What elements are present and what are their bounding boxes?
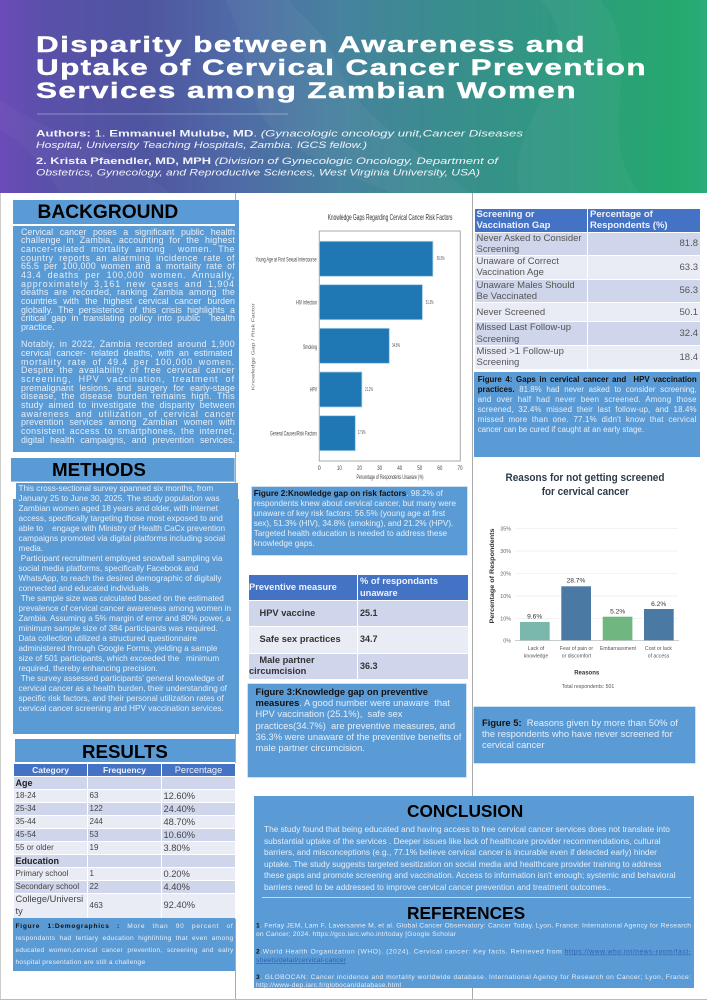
table: demographics: 45-54	[16, 830, 36, 839]
text: methods: connected and educated individuals.	[18, 584, 151, 593]
y axis ticks	[500, 526, 511, 644]
heading: references: REFERENCES	[407, 903, 525, 923]
text: methods: media.	[18, 544, 43, 553]
category labels: General Causes/Risk Factors	[270, 430, 317, 438]
category labels: Smoking	[303, 344, 317, 351]
caption: figure 5: the respondents who have never screened for	[482, 728, 673, 739]
caption: figure 4: missed more than one. 77.1% didn't know that cervical	[478, 415, 697, 424]
title: Uptake of Cervical Cancer Prevention	[36, 55, 647, 80]
table: demographics: 19	[90, 843, 98, 852]
heading: results	[15, 739, 235, 762]
bars	[319, 241, 433, 451]
bar value labels: 5.2%	[610, 608, 625, 616]
text: conclusion: barriers need to be addressed to improve cervical cancer prevention and treatment outcomes..	[264, 882, 611, 892]
y axis ticks: 10%	[500, 617, 511, 623]
text: conclusion: these gaps and promote screening and vaccination. Access to information isn't enough; systemic and behavioral	[264, 870, 676, 880]
text: methods: size of 501 participants, which exceeded the minimum	[18, 654, 219, 663]
table: demographics: 1	[90, 869, 94, 878]
text: methods: prevalence of cervical cancer awareness among women in	[18, 604, 231, 613]
y axis title: Percentage of Respondents	[489, 528, 496, 624]
category labels: of access	[648, 654, 670, 660]
table: screening and vaccination gaps: 56.3	[680, 285, 698, 296]
chart: knowledge gaps on risk factors	[250, 212, 463, 481]
text: background: screening, HPV vaccination, treatment of	[21, 374, 235, 384]
header banner	[0, 0, 707, 193]
table: screening and vaccination gaps: Be Vaccinated	[476, 291, 537, 302]
caption: figure 3: practices(34.7%) are preventive measures, and	[256, 720, 455, 731]
caption: figure 2: Targeted health education is needed to address these	[254, 529, 447, 538]
table: demographics: Primary school	[16, 869, 68, 878]
text: background: awareness and utilization of cervical cancer	[21, 409, 235, 419]
text: background: 65.5 per 100,000 women and a mortality rate of	[21, 261, 235, 271]
y axis ticks: 20%	[500, 571, 511, 577]
table: demographics: 4.40%	[164, 882, 190, 892]
authors	[36, 128, 523, 178]
table: preventive measures: 34.7	[360, 634, 378, 644]
table: demographics: 24.40%	[164, 804, 195, 814]
table: demographics: Frequency	[103, 765, 146, 775]
text: background: Despite the availability of free cervical cancer	[21, 365, 235, 375]
table: demographics: 22	[90, 882, 98, 891]
caption: figure 4: cancer can be cured if caught at an early stage.	[478, 425, 644, 434]
text: conclusion: uptake. The study suggests targeted sesitization on social media and healthcare provider training to address	[264, 859, 661, 869]
table: demographics: 35-44	[16, 817, 36, 826]
text: conclusion: The study found that being educated and having access to free cervical cancer services does not translate into	[264, 824, 670, 834]
category labels: knowledge	[524, 654, 548, 660]
table: preventive measures	[249, 575, 468, 679]
text: references: on Cancer; 2024. https://gco.iarc.who.int/today [Google Scholar	[256, 931, 457, 938]
caption: figure 1	[13, 918, 235, 971]
table: screening and vaccination gaps: Unaware Males Should	[476, 280, 575, 291]
authors: 2. Krista Pfaendler, MD, MPH (Division of Gynecologic Oncology, Department of	[36, 156, 500, 167]
table: demographics: Education	[16, 856, 59, 866]
total respondents note: Total respondents: 501	[562, 684, 614, 690]
text: references	[256, 922, 691, 988]
text: methods: campaigns promoted via digital platforms including social	[18, 534, 225, 543]
caption: figure 5: Figure 5: Reasons given by more than 50% of	[482, 716, 678, 728]
text: background: digital health campaigns, and prevention services.	[21, 435, 235, 445]
y axis ticks: 35%	[500, 526, 511, 532]
table: preventive measures: % of respondants	[360, 576, 438, 586]
caption: figure 5	[474, 707, 695, 763]
text: background: critical gap in translating policy into public health	[21, 313, 235, 323]
authors: Hospital, University Teaching Hospitals, Zambia. IGCS fellow.)	[36, 140, 367, 151]
caption: figure 1: respondants had tertiary education highlihting that even among	[16, 935, 234, 942]
panel: methods: METHODS	[52, 459, 146, 480]
text: methods: The survey assessed participants' general knowledge of	[21, 674, 224, 683]
table: demographics	[14, 763, 236, 919]
text: background: study aimed to investigate the disparity between	[21, 400, 235, 410]
x axis: 70	[458, 465, 463, 472]
table: preventive measures: Male partner	[259, 655, 315, 665]
caption: figure 4	[474, 372, 700, 457]
heading: conclusion: CONCLUSION	[407, 801, 523, 821]
x axis	[318, 465, 463, 481]
table: preventive measures: 25.1	[360, 608, 378, 618]
text: background: consistent access to smartphones, the internet,	[21, 426, 235, 436]
table: demographics: 0.20%	[164, 869, 190, 879]
caption: figure 3: male partner circumcision.	[256, 742, 365, 753]
text: methods: Zambian women aged 18 years and older, with internet	[18, 504, 218, 513]
text: background: country reports an alarming incidence rate of	[21, 253, 235, 263]
table: screening and vaccination gaps: 81.8	[680, 238, 698, 249]
y axis title: Knowledge Gap / Risk Factor	[250, 303, 256, 390]
table: screening and vaccination gaps: Percentage of	[590, 209, 653, 220]
table: preventive measures: unaware	[360, 588, 398, 598]
axis title: Reasons	[574, 670, 600, 676]
caption: figure 4: Figure 4: Gaps in cervical cancer and HPV vaccination	[478, 375, 697, 384]
text: methods: able to engage with Ministry of Health CaCx prevention	[18, 524, 225, 533]
table: demographics: 48.70%	[164, 817, 195, 827]
bar value labels: 6.2%	[651, 601, 666, 608]
text: conclusion: substantial uptake of the services . Deeper issues like lack of healthcare provider recommendations, cultural	[264, 836, 661, 846]
text: background: cancer-related mortality among women. The	[21, 244, 235, 254]
text: methods: This cross-sectional survey spanned six months, from	[18, 484, 213, 493]
table: screening and vaccination gaps: 50.1	[680, 307, 698, 318]
table: demographics: 92.40%	[164, 900, 195, 910]
text: background	[21, 227, 235, 445]
panel: methods	[11, 458, 239, 734]
caption: figure 3: HPV vaccination (25.1%), safe sex	[256, 708, 402, 719]
table: demographics: College/University	[16, 894, 83, 916]
value labels: 51.3%	[426, 300, 434, 306]
text: methods: January 25 to June 30, 2025. The study population was	[18, 494, 220, 503]
table: screening and vaccination gaps	[475, 209, 700, 369]
text: methods: Zambia. Assuming a 5% margin of error and 80% power, a	[18, 614, 231, 623]
table: preventive measures: circumcision	[249, 666, 306, 676]
text: methods: Participant recruitment employed snowball sampling via	[21, 554, 222, 563]
text: background: cervical cancer- related deaths, with an estimated	[21, 348, 233, 358]
caption: figure 1: hospital presentation are still a challenge	[16, 959, 145, 966]
text: references: sheets/detail/cervical-cancer	[256, 957, 347, 964]
panel: conclusion and references	[254, 796, 694, 988]
x axis: 40	[397, 465, 402, 472]
authors: Obstetrics, Gynecology, and Reproductive Sciences, West Virginia University, USA)	[36, 168, 480, 178]
category labels: Cost or lack	[645, 646, 672, 652]
text: background: Cervical cancer poses a significant public health	[21, 227, 235, 237]
text: methods: specific risk factors, and their personal utilization rates of	[18, 694, 224, 703]
heading: background	[13, 200, 235, 226]
text: background: deaths are recorded, ranking Zambia among the	[21, 287, 235, 297]
text: methods: social media platforms, specifically Facebook and	[18, 564, 198, 573]
text: methods: access, specifically targeting those most exposed to and	[18, 514, 223, 523]
text: background: countries with the highest cervical cancer burden	[21, 296, 235, 306]
category labels: Embarrassment	[600, 646, 637, 652]
text: methods: Data collection utilized a structured questionnaire	[18, 634, 197, 643]
table: demographics: 63	[90, 791, 98, 800]
caption: figure 2: unaware of key risk factors: 56.5% (young age at first	[254, 509, 445, 518]
category labels: or discomfort	[562, 654, 592, 660]
text: conclusion	[264, 824, 676, 892]
caption: figure 2: Figure 2:Knowledge gap on risk factors. 98.2% of	[254, 489, 443, 498]
chart title: Reasons for not getting screened	[506, 472, 664, 484]
table: preventive measures: Preventive measure	[249, 582, 337, 592]
table: screening and vaccination gaps: Missed >1 Follow-up	[476, 346, 564, 357]
table: screening and vaccination gaps: Respondents (%)	[590, 220, 668, 231]
x axis: 0	[318, 465, 321, 472]
table: preventive measures: HPV vaccine	[260, 608, 315, 618]
value labels: 17.9%	[358, 430, 366, 436]
x axis: 60	[437, 465, 443, 472]
panel: background	[13, 200, 239, 452]
caption: figure 3	[248, 684, 466, 777]
category labels: HPV	[310, 386, 317, 394]
table: demographics: Age	[16, 778, 33, 788]
table: demographics: 122	[90, 804, 103, 813]
chart title: for cervical cancer	[542, 486, 630, 498]
category labels: Fear of pain or	[560, 646, 593, 652]
table: demographics: 3.80%	[164, 843, 190, 853]
table: demographics: 25-34	[16, 804, 36, 813]
value labels: 34.8%	[392, 343, 400, 349]
text: background: challenge in Zambia, accounting for the highest	[21, 235, 235, 245]
bar value labels: 28.7%	[567, 578, 585, 584]
text: methods	[18, 484, 231, 713]
caption: figure 2: knowledge gaps.	[254, 539, 315, 548]
table: demographics: 18-24	[16, 791, 36, 800]
x axis: 10	[337, 465, 342, 472]
caption: figure 3: Figure 3:Knowledge gap on preventive	[256, 686, 428, 696]
caption: figure 2: sex), 51.3% (HIV), 34.8% (smoking), and 21.2% (HPV).	[254, 519, 453, 528]
x axis: 30	[377, 465, 382, 472]
category labels: Young Age at First Sexual Intercourse	[256, 256, 317, 264]
caption: figure 4: practices. 81.8% had never asked to consider screening,	[478, 385, 697, 394]
table: demographics: 53	[90, 830, 98, 839]
text: references: 2.World Health Organization (WHO). (2024). Cervical cancer: Key facts. Retrieved from https://www.who.int/news-room/fact-	[256, 948, 691, 956]
text: background: disease, the disease burden remains high. This	[21, 391, 235, 401]
value labels: 56.5%	[437, 256, 445, 262]
panel: results	[13, 739, 236, 971]
chart: reasons for not getting screened	[489, 472, 679, 690]
table: screening and vaccination gaps: Unaware of Correct	[476, 256, 559, 267]
table: screening and vaccination gaps: Screening	[476, 357, 519, 368]
text: background: premalignant lesions, and surgery for early-stage	[21, 383, 235, 393]
caption: figure 4: screened, 32.4% missed their last follow-up, and 18.4%	[478, 405, 697, 414]
y axis ticks: 0%	[503, 638, 511, 644]
caption: figure 5: cervical cancer	[482, 739, 545, 750]
table: screening and vaccination gaps: Screening	[476, 244, 519, 255]
text: background: Notably, in 2022, Zambia recorded around 1,900	[21, 339, 235, 349]
category labels	[524, 646, 672, 660]
text: background: globally. The persistence of this crisis highlights a	[21, 305, 235, 315]
value labels	[358, 256, 445, 436]
text: methods: minimum sample size of 384 participants was required.	[18, 624, 218, 633]
text: background: mortality rate of 49.4 per 100,000 women.	[21, 357, 235, 367]
text: background: 43.4 deaths per 100,000 women. Annually,	[21, 270, 235, 280]
table: demographics: 55 or older	[16, 843, 54, 852]
table: preventive measures: Safe sex practices	[260, 634, 341, 644]
table: demographics: Percentage	[175, 765, 222, 775]
table: screening and vaccination gaps: Vaccination Age	[476, 267, 544, 278]
heading: methods	[11, 458, 235, 482]
panel: results: RESULTS	[82, 741, 168, 762]
text: methods: cervical cancer screening and HPV vaccination services.	[18, 704, 224, 713]
table: screening and vaccination gaps: Vaccination Gap	[476, 220, 550, 231]
x axis: 20	[357, 465, 362, 472]
text: conclusion: barriers, and misconceptions (e.g., 77.1% believe cervical cancer is incurable even if detected early) hinder	[264, 847, 657, 857]
table: screening and vaccination gaps: 63.3	[680, 262, 698, 273]
caption: figure 3: measures. A good number were unaware that	[256, 697, 450, 708]
text: methods: cervical cancer as a health burden, their understanding of	[18, 684, 227, 693]
table: screening and vaccination gaps: Never Asked to Consider	[476, 233, 582, 244]
text: methods: administered through Google Forms, yielding a sample	[18, 644, 217, 653]
bar value labels	[527, 578, 666, 620]
authors: Authors: 1. Emmanuel Mulube, MD . (Gynacologic oncology unit,Cancer Diseases	[36, 128, 523, 140]
caption: figure 3: 36.3% were unaware of the preventive benefits of	[256, 731, 461, 742]
title	[36, 32, 647, 103]
bars	[520, 586, 674, 640]
table: screening and vaccination gaps: 32.4	[680, 328, 698, 339]
category labels: Lack of	[528, 646, 545, 652]
title: Disparity between Awareness and	[36, 32, 586, 57]
table: screening and vaccination gaps: Screening	[476, 334, 519, 345]
table: screening and vaccination gaps: 18.4	[680, 352, 698, 363]
text: methods: WhatsApp, to reach the desired demographic of digitally	[18, 574, 221, 583]
caption: figure 4: and over half had never been screened. Among those	[478, 395, 697, 404]
text: references: 1. Ferlay JEM, Lam F, Laversanne M, et al. Global Cancer Observatory: Cancer Today. Lyon, France: International Agency for Research	[256, 922, 691, 929]
caption: figure 1: Figure 1:Demographics : More than 90 percent of	[16, 923, 234, 930]
chart title	[506, 472, 664, 498]
y axis ticks: 30%	[500, 549, 511, 555]
text: background: practice.	[21, 322, 55, 332]
text: references: 3. GLOBOCAN: Cancer incidence and mortality worldwide database. International Agency for Research on Cancer; Lyon, France:	[256, 974, 691, 981]
table: demographics: Secondary school	[16, 882, 79, 891]
caption: figure 1: educated women,cervical cancer prevention, screening and ealry	[16, 947, 234, 954]
category labels	[256, 256, 317, 438]
text: background: approximately 3,161 new cases and 1,904	[21, 279, 235, 289]
table: demographics: 10.60%	[164, 830, 195, 840]
text: methods: required, thereby enhancing precision.	[18, 664, 158, 673]
caption: figure 2	[252, 487, 467, 555]
table: demographics: Category	[32, 765, 69, 775]
table: demographics: 12.60%	[164, 791, 195, 801]
y axis ticks: 10%	[500, 594, 511, 600]
caption: figure 2: respondents knew about cervical cancer, but many were	[254, 499, 456, 508]
table: screening and vaccination gaps: Never Screened	[476, 307, 545, 318]
table: demographics: 463	[90, 901, 103, 910]
panel: background: BACKGROUND	[38, 202, 178, 223]
table: screening and vaccination gaps: Missed Last Follow-up	[476, 322, 571, 333]
bar value labels: 9.6%	[527, 614, 542, 620]
x axis: 50	[417, 465, 423, 472]
text: methods: The sample size was calculated based on the estimated	[21, 594, 224, 603]
value labels: 21.2%	[365, 387, 373, 393]
text: background: prevention services among Zambian women with	[21, 417, 235, 427]
title: Services among Zambian Women	[36, 78, 577, 103]
table: preventive measures: 36.3	[360, 661, 378, 671]
category labels: HIV Infection	[296, 300, 317, 306]
table: screening and vaccination gaps: Screening or	[476, 209, 535, 220]
table: demographics: 244	[90, 817, 103, 826]
